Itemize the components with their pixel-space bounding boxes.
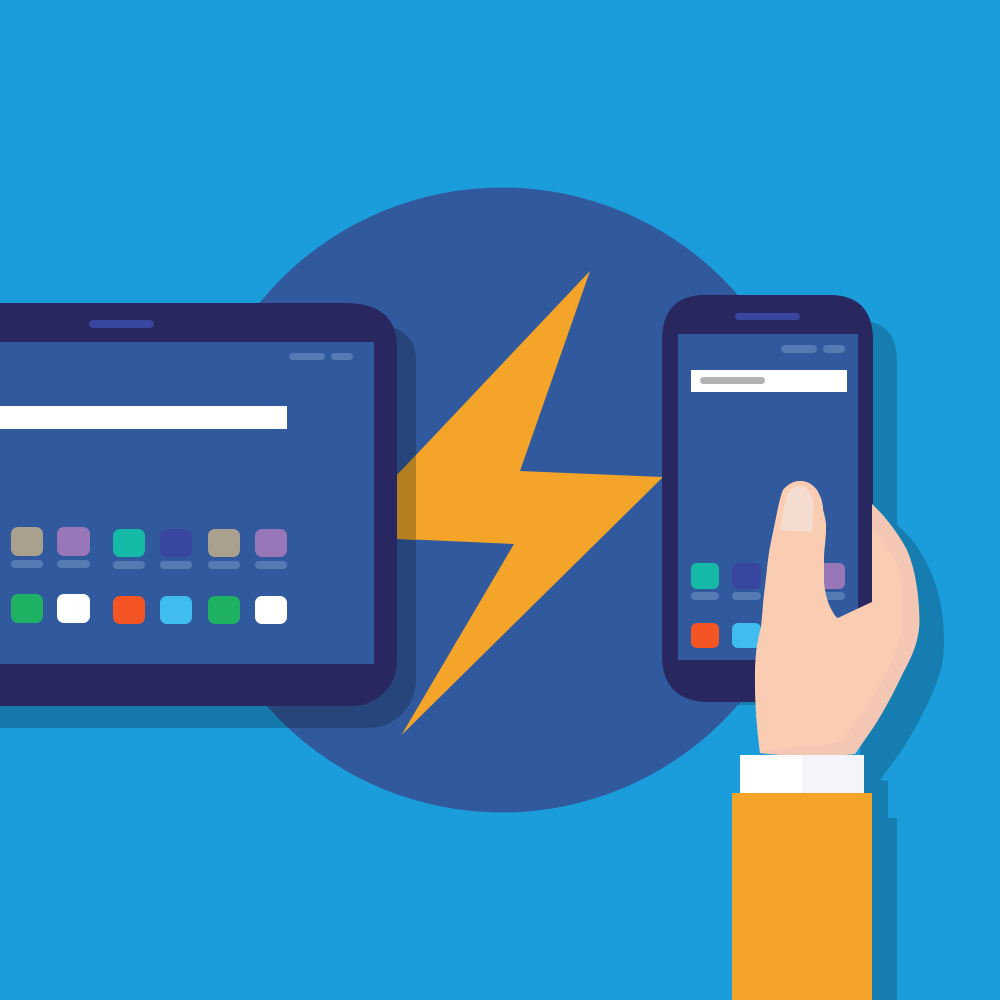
tablet app icons row one <box>11 527 287 557</box>
phone body <box>662 295 873 702</box>
phone and hand shadow <box>738 321 944 1000</box>
tablet <box>0 303 397 706</box>
phone app labels <box>691 592 845 600</box>
tablet app labels <box>11 560 287 569</box>
tablet speaker <box>89 320 154 328</box>
shirt cuff <box>740 755 864 793</box>
phone status bars <box>781 345 845 353</box>
hand highlight <box>755 481 902 752</box>
tablet status bars <box>289 353 353 360</box>
background circle <box>190 188 814 812</box>
tablet search bar <box>0 406 287 429</box>
lightning bolt <box>380 271 663 735</box>
tablet app icons row two <box>11 594 287 624</box>
thumbnail <box>780 486 813 532</box>
phone app icons <box>691 563 845 648</box>
smartphone <box>662 295 873 702</box>
phone speaker <box>735 313 800 320</box>
hand outline and shading <box>755 481 920 756</box>
phone search bar <box>691 370 847 392</box>
tablet shadow <box>0 325 416 728</box>
hand <box>755 481 920 756</box>
phone search placeholder <box>700 377 765 384</box>
phone screen <box>678 334 858 660</box>
shaded part of lightning bolt <box>397 455 416 540</box>
jacket sleeve <box>732 793 872 1000</box>
tablet screen <box>0 342 374 664</box>
tablet body <box>0 303 397 706</box>
